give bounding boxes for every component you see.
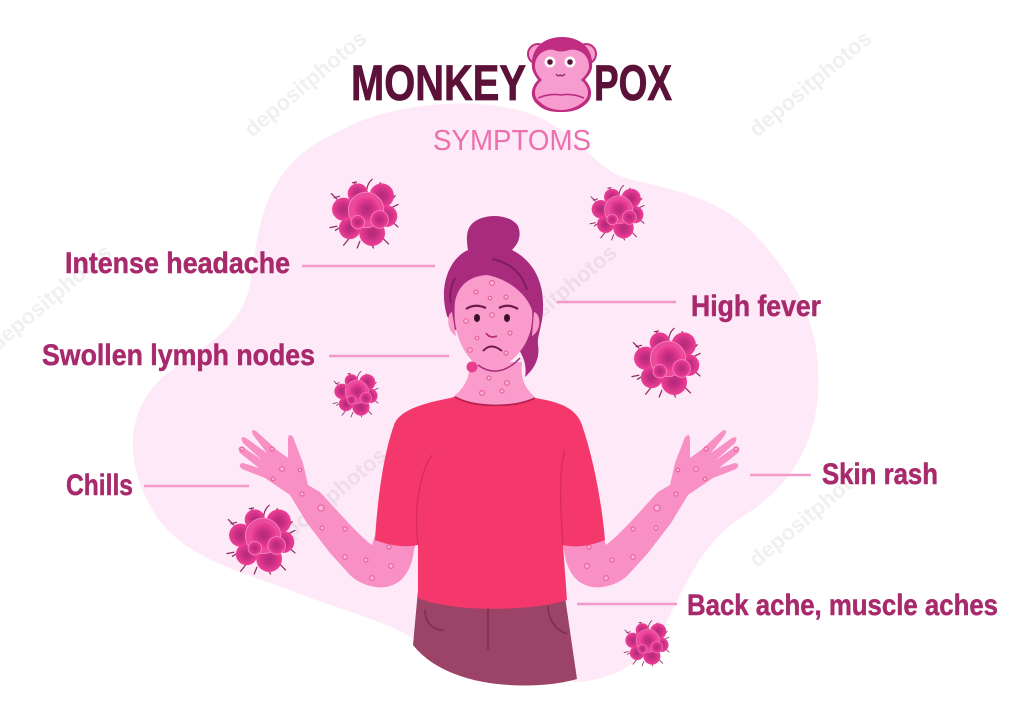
virus particles	[227, 179, 700, 666]
ear	[448, 312, 456, 336]
eyebrows and eyes	[466, 306, 518, 309]
left arm	[239, 430, 417, 587]
icon: monkey face	[528, 37, 596, 112]
subtitle: SYMPTOMS	[433, 125, 591, 157]
heading: monkey: MONKEY	[351, 55, 526, 111]
t-shirt	[375, 397, 605, 609]
watermark text: depositphotos	[239, 25, 371, 142]
watermark text	[0, 25, 876, 572]
virus 1	[330, 179, 398, 248]
swollen lymph node	[466, 362, 478, 372]
virus 3	[632, 328, 700, 397]
watermark text: depositphotos	[259, 442, 391, 559]
rash spots	[464, 280, 512, 395]
heading: pox: POX	[594, 55, 672, 111]
virus 5	[227, 505, 295, 574]
hair back	[444, 216, 543, 377]
label: chills: Chills	[66, 469, 133, 502]
virus 2	[590, 185, 644, 240]
virus 6	[624, 621, 669, 666]
label: high fever: High fever	[691, 290, 821, 323]
watermark text: depositphotos	[744, 25, 876, 142]
label: swollen lymph nodes: Swollen lymph nodes	[42, 339, 315, 372]
neck	[448, 362, 538, 412]
watermark text: depositphotos	[489, 239, 621, 356]
label: intense headache: Intense headache	[65, 247, 290, 280]
pants	[413, 590, 577, 686]
right arm	[561, 430, 739, 587]
watermark text: depositphotos	[744, 455, 876, 572]
label: skin rash: Skin rash	[822, 458, 938, 491]
background blob	[133, 103, 818, 682]
woman figure	[239, 216, 739, 686]
title	[351, 37, 672, 112]
nose and mouth	[486, 333, 497, 337]
face	[454, 275, 532, 370]
virus 4	[333, 372, 378, 417]
